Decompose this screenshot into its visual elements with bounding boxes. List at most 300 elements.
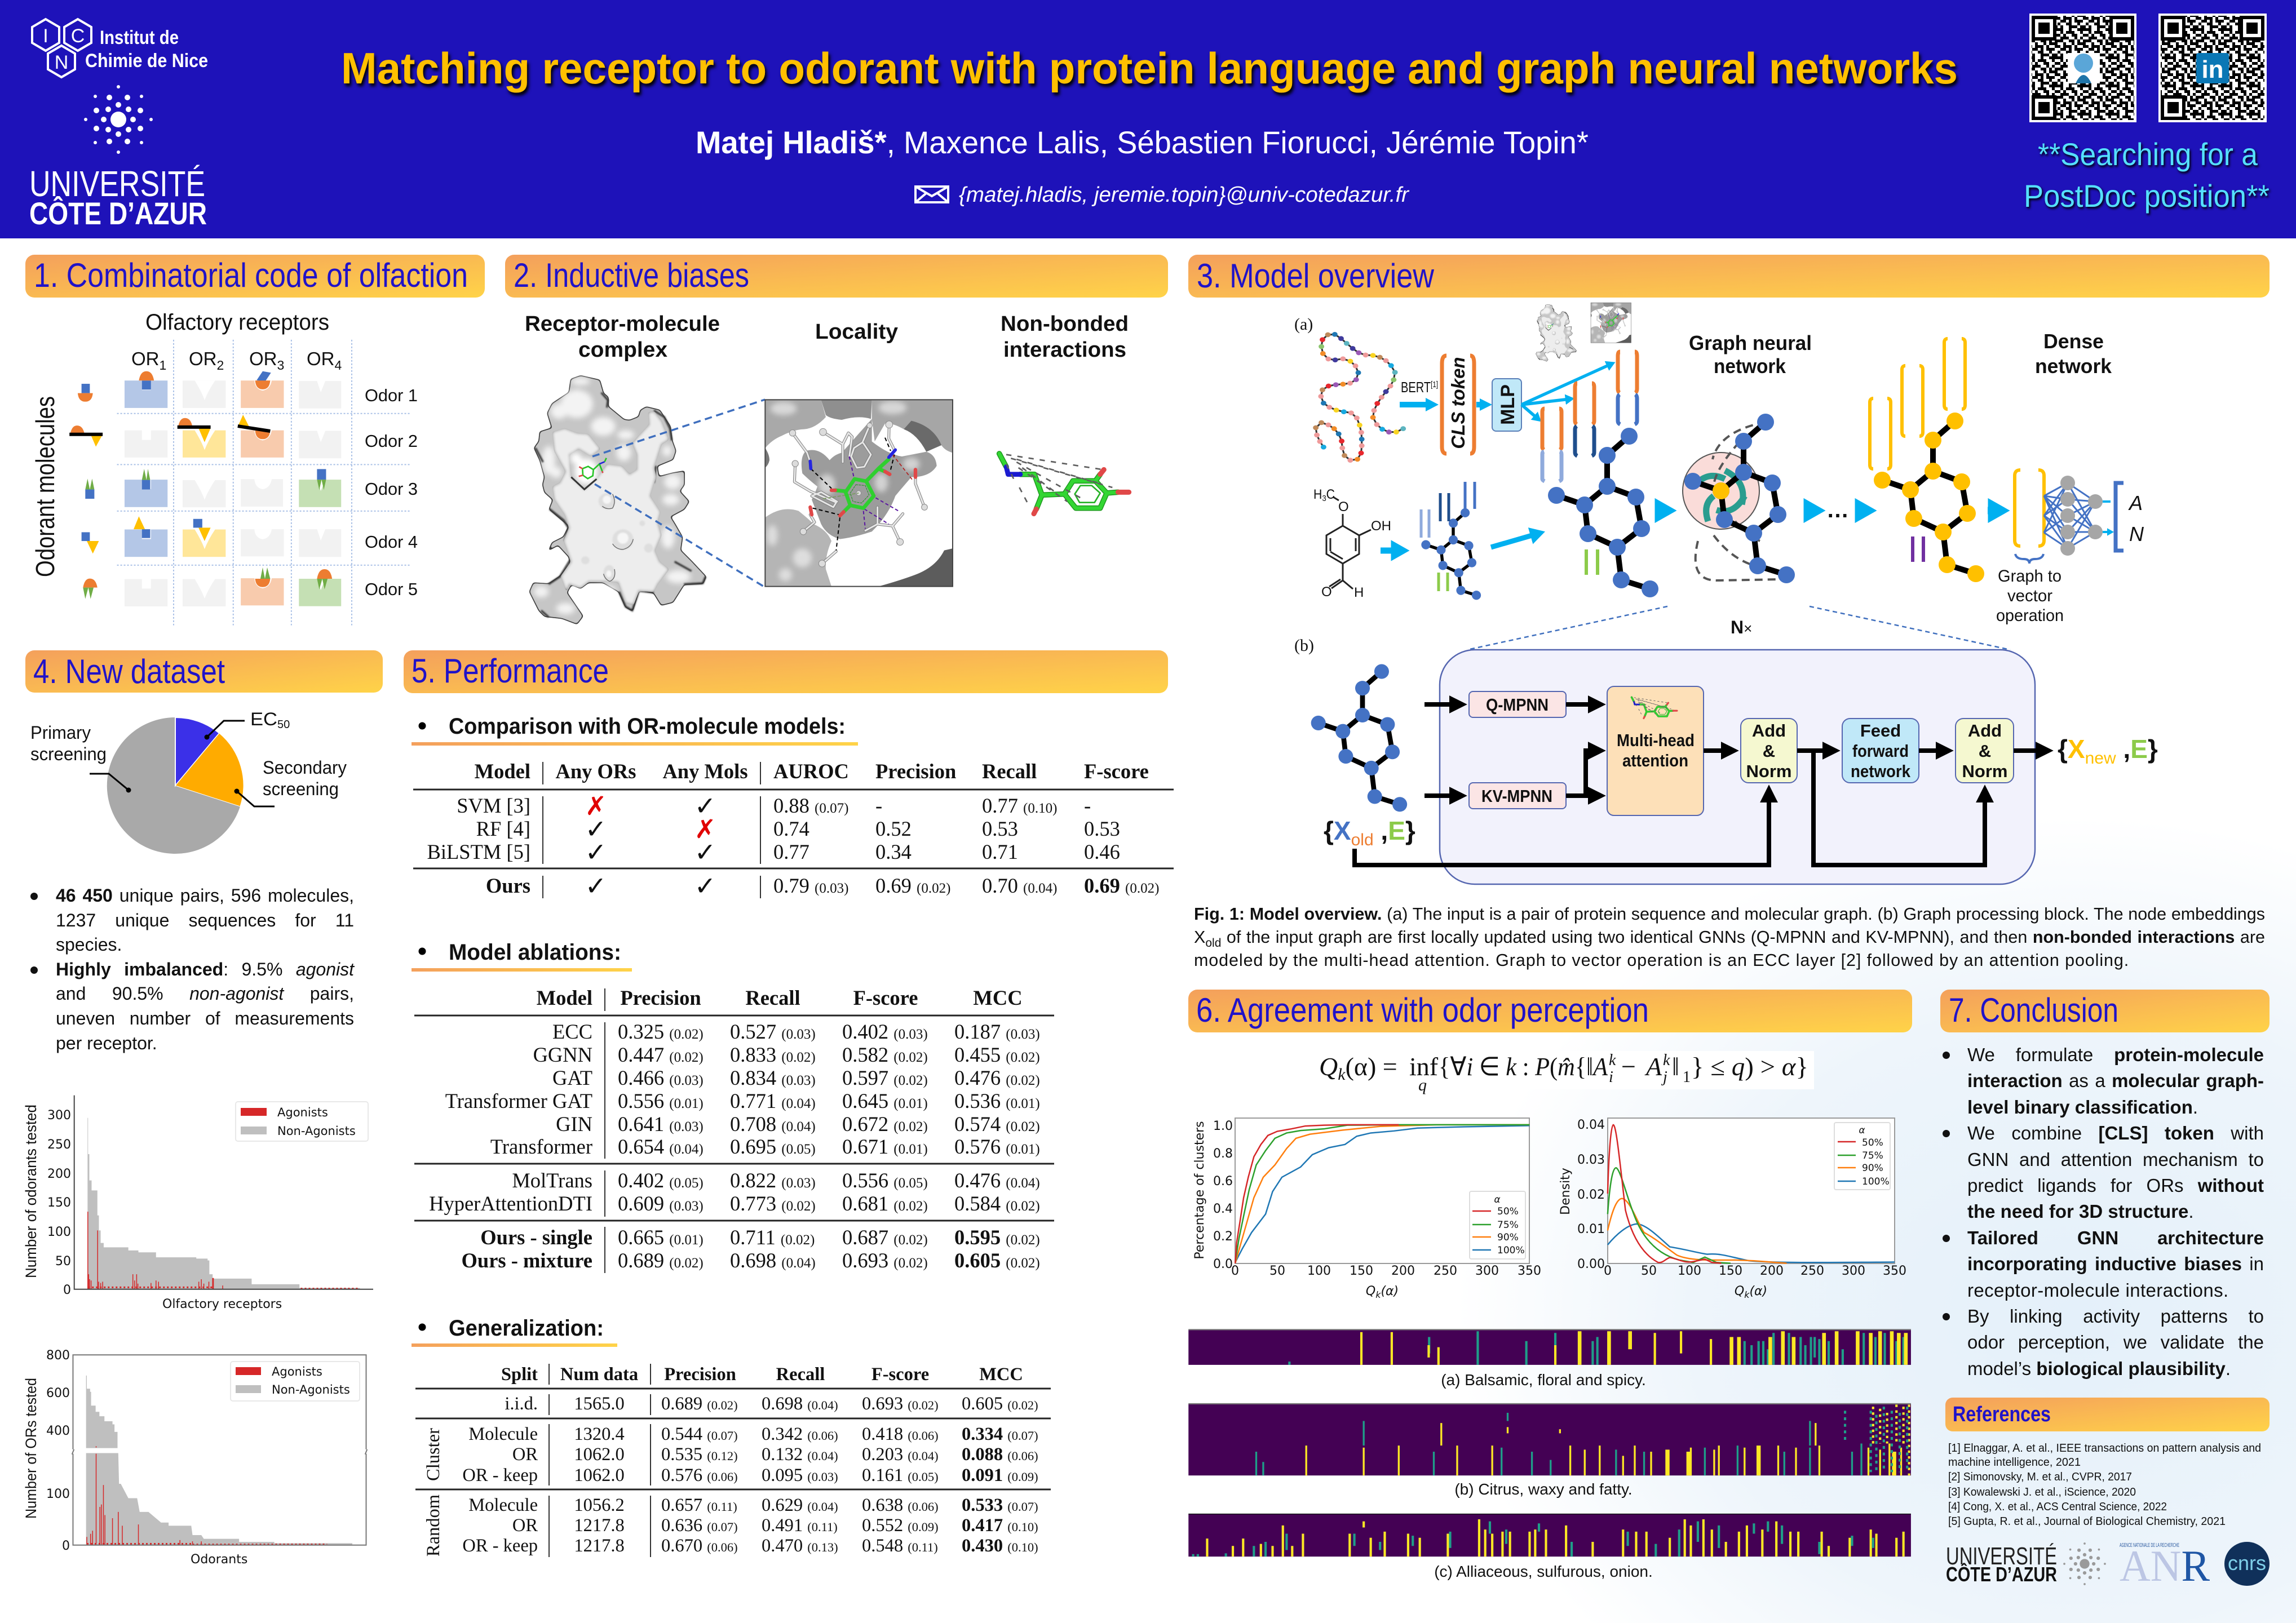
small molecular graph — [1421, 508, 1481, 600]
pie chart: screening types: 50 — [277, 719, 290, 731]
table: model ablations — [414, 986, 1054, 1273]
CLS token vector — [1442, 356, 1474, 454]
table: model ablations: 0.822 (0.03) — [730, 1169, 816, 1192]
table: comparison with OR-molecule models: 0.52 — [875, 817, 912, 840]
text block: conclusion bullets: receptor-molecule interactions. — [1967, 1280, 2229, 1301]
label: X new, E: new — [2085, 749, 2116, 768]
arrow: structure to small graph — [1381, 548, 1400, 553]
table: model ablations: MolTrans — [512, 1169, 592, 1192]
decorative background wash — [1297, 817, 2296, 1623]
block: KV-MPNN — [1469, 783, 1566, 809]
panel: 5. Performance — [404, 650, 1174, 1557]
chemical structure: vanillin — [1313, 487, 1391, 600]
formula: ‖ — [1672, 1052, 1679, 1081]
molecular graph: input — [1548, 428, 1658, 597]
table: comparison with OR-molecule models — [413, 760, 1174, 901]
bar chart: odorants tested per receptor: Number of odorants tested — [23, 1105, 39, 1278]
logo: Institut de Chimie de Nice: Institut de — [100, 27, 179, 48]
formula: 1 — [1683, 1068, 1691, 1086]
contact email: {matej.hladis, jeremie.topin}@univ-cotedazur.fr — [959, 183, 1409, 207]
table: generalization: 1565.0 — [574, 1394, 625, 1414]
authors: Matej Hladiš*, Maxence Lalis, Sébastien Fiorucci, Jérémie Topin* — [696, 125, 1589, 160]
heading: graph neural network — [1689, 331, 1812, 378]
figure caption: model overview: Xold of the input graph are first locally updated using two identical GNNs (Q-MPNN and KV-MPNN), and then non-bonded interactions are — [1194, 928, 2265, 950]
text block: conclusion bullets: the need for 3D structure. — [1967, 1201, 2194, 1222]
table: model ablations: Model — [537, 986, 592, 1009]
block: add and norm 2: & — [1979, 741, 1991, 761]
table: generalization: 0.693 (0.02) — [862, 1394, 939, 1414]
receptor column labels: 4 — [335, 358, 342, 373]
table: model ablations: 0.605 (0.02) — [954, 1249, 1040, 1272]
text block: dataset bullets: 1237 unique sequences for 11 — [56, 910, 354, 930]
text block: conclusion bullets: We formulate protein-molecule — [1967, 1044, 2264, 1065]
table: model ablations: 0.187 (0.03) — [954, 1020, 1040, 1043]
block: KV-MPNN: KV-MPNN — [1481, 786, 1552, 806]
line chart: cumulative Qk: 75% — [1497, 1220, 1519, 1231]
table: model ablations: 0.476 (0.02) — [954, 1066, 1040, 1089]
bullet marker — [30, 893, 38, 900]
figure caption: model overview — [1194, 904, 2265, 970]
line chart: density of Qk: 0 — [1604, 1264, 1612, 1278]
label: non-bonded interactions: Non-bonded — [1001, 312, 1129, 336]
table: model ablations: 0.556 (0.05) — [842, 1169, 928, 1192]
table: generalization: Cluster — [423, 1428, 444, 1481]
table: generalization: Recall — [776, 1364, 825, 1385]
table: comparison with OR-molecule models: Ours — [486, 874, 530, 897]
table: model ablations: 0.833 (0.02) — [730, 1043, 816, 1066]
caption (c): (c) Alliaceous, sulfurous, onion. — [1434, 1563, 1653, 1580]
bar chart: receptors tested per odorant: Non-Agonists — [272, 1383, 350, 1396]
table: comparison with OR-molecule models: ✓ — [585, 837, 607, 867]
arrows from MLP to node vectors — [1521, 364, 1611, 419]
text block: dataset bullets: and 90.5% non-agonist pairs, — [56, 983, 354, 1004]
table: comparison with OR-molecule models: AUROC — [773, 760, 849, 783]
table: model ablations: 0.584 (0.02) — [954, 1192, 1040, 1215]
line chart: density of Qk: 0.00 — [1577, 1257, 1605, 1271]
table: comparison with OR-molecule models: ✗ — [694, 814, 716, 844]
heading 2: 2. Inductive biases — [514, 256, 749, 294]
table: model ablations: ECC — [552, 1020, 592, 1043]
table: generalization: 0.698 (0.04) — [762, 1394, 838, 1414]
line chart: cumulative Qk: Percentage of clusters — [1193, 1121, 1207, 1260]
table: model ablations: 0.711 (0.02) — [730, 1226, 815, 1249]
block: add and norm 1: & — [1763, 741, 1775, 761]
bar chart: receptors tested per odorant: Agonists — [272, 1365, 322, 1378]
block: add and norm 1 — [1741, 719, 1797, 783]
formula: j — [1661, 1068, 1667, 1086]
table: comparison with OR-molecule models: RF [4] — [476, 817, 530, 840]
formula — [1313, 1051, 1814, 1094]
label: X old, E: , — [1374, 816, 1388, 845]
table: comparison with OR-molecule models: ✓ — [694, 837, 716, 867]
zoom guide lines between a and b — [1467, 606, 2010, 650]
table: model ablations: 0.447 (0.02) — [618, 1043, 704, 1066]
text block: conclusion bullets — [1967, 1044, 2264, 1379]
block: add and norm 1: Add — [1752, 721, 1786, 740]
table: generalization: OR - keep — [462, 1465, 538, 1485]
text block: conclusion bullets: By linking activity patterns to — [1967, 1306, 2264, 1327]
table: generalization: 0.088 (0.06) — [962, 1444, 1038, 1465]
heading 2 — [505, 255, 1168, 298]
heading: dense network — [2035, 330, 2112, 378]
table: model ablations: 0.609 (0.03) — [618, 1192, 704, 1215]
logo: Université Côte d'Azur footer: CÔTE D’AZUR — [1946, 1562, 2057, 1586]
formula: A — [1644, 1052, 1662, 1081]
table: generalization: OR — [512, 1515, 538, 1536]
table: model ablations: 0.665 (0.01) — [618, 1226, 704, 1249]
arrows between GNN stages — [1656, 507, 1999, 514]
logo: CNRS: cnrs — [2228, 1551, 2266, 1575]
table: model ablations: GGNN — [533, 1043, 592, 1066]
bar chart: odorants tested per receptor — [23, 1096, 373, 1311]
text block: dataset bullets: species. — [56, 934, 122, 955]
table: model ablations: 0.695 (0.05) — [730, 1135, 816, 1158]
table: generalization: 0.548 (0.11) — [862, 1536, 938, 1556]
label: graph to vector operation: vector — [2007, 587, 2052, 605]
table: comparison with OR-molecule models: 0.70 (0.04) — [982, 874, 1057, 897]
line chart: density of Qk: 0.01 — [1577, 1222, 1605, 1236]
heading 4 — [25, 650, 383, 693]
line chart: cumulative Qk: 250 — [1434, 1264, 1457, 1278]
table: model ablations: 0.834 (0.03) — [730, 1066, 816, 1089]
line chart: cumulative Qk: Q — [1366, 1284, 1375, 1298]
table: comparison with OR-molecule models: 0.53 — [1084, 817, 1120, 840]
table: comparison with OR-molecule models: 0.77 (0.10) — [982, 794, 1057, 817]
table: generalization: 0.533 (0.07) — [962, 1495, 1038, 1515]
molecular graph: output — [1874, 413, 1984, 582]
table: generalization: 0.552 (0.09) — [862, 1515, 939, 1536]
purple edge feature marks — [1913, 536, 1923, 562]
line chart: density of Qk: 0.02 — [1577, 1188, 1605, 1202]
line chart: cumulative Qk: k — [1375, 1289, 1381, 1300]
table: generalization: 1320.4 — [574, 1424, 625, 1444]
block: feed forward network: network — [1851, 761, 1911, 781]
receptor column labels: OR — [189, 348, 216, 369]
table: model ablations: 0.693 (0.02) — [842, 1249, 928, 1272]
bar chart: odorants tested per receptor: 0 — [63, 1283, 71, 1297]
call-out: searching for a postdoc — [2024, 136, 2270, 214]
logo: Université Côte d'Azur: CÔTE D’AZUR — [29, 196, 207, 231]
table: generalization: 0.605 (0.02) — [962, 1394, 1038, 1414]
logo: ANR: ANR — [2120, 1541, 2210, 1590]
table: comparison with OR-molecule models: 0.34 — [875, 840, 912, 863]
heatmap (b) — [1188, 1404, 1911, 1475]
table: generalization: 1056.2 — [574, 1495, 625, 1515]
line chart: cumulative Qk: 0.6 — [1213, 1174, 1233, 1189]
MLP block — [1492, 379, 1521, 431]
table: model ablations: Transformer — [490, 1135, 592, 1158]
line chart: density of Qk: 150 — [1719, 1264, 1742, 1278]
dense network diagram: N — [2129, 522, 2144, 546]
block: add and norm 2: Add — [1968, 721, 2002, 740]
table: model ablations: 0.687 (0.02) — [842, 1226, 928, 1249]
bar chart: receptors tested per odorant: 100 — [46, 1487, 70, 1501]
table: generalization: i.i.d. — [505, 1394, 538, 1414]
call-out: searching for a postdoc: PostDoc position** — [2024, 178, 2270, 214]
label: receptor-molecule complex — [525, 312, 720, 362]
bar chart: receptors tested per odorant: 0 — [62, 1539, 70, 1553]
line chart: cumulative Qk: 100 — [1307, 1264, 1331, 1278]
panel: 6. Agreement with odor perception — [1188, 990, 1912, 1580]
line chart: density of Qk: (α) — [1749, 1284, 1767, 1298]
label: X old, E: old — [1351, 831, 1374, 849]
table: generalization: 0.670 (0.06) — [661, 1536, 738, 1556]
call-out: searching for a postdoc: **Searching for a — [2038, 136, 2258, 172]
table: generalization: 0.629 (0.04) — [762, 1495, 838, 1515]
table: generalization: Random — [423, 1495, 444, 1557]
receptor column labels: 3 — [277, 358, 284, 373]
line chart: cumulative Qk: 100% — [1497, 1245, 1525, 1256]
reference list: [5] Gupta, R. et al., Journal of Biological Chemistry, 2021 — [1948, 1515, 2226, 1528]
table: model ablations: 0.708 (0.04) — [730, 1112, 816, 1136]
bullet marker — [1943, 1313, 1950, 1320]
table: model ablations: 0.325 (0.02) — [618, 1020, 704, 1043]
line chart: cumulative Qk: 300 — [1475, 1264, 1499, 1278]
formula: k — [1338, 1065, 1346, 1084]
odor row labels — [365, 385, 418, 599]
block: feed forward network — [1842, 719, 1919, 783]
panel: 7. Conclusion heading: 7. Conclusion — [1949, 991, 2118, 1029]
figure part label (b): (b) — [1294, 636, 1314, 655]
QR code: LinkedIn: in — [2201, 56, 2224, 83]
table: model ablations: 0.671 (0.01) — [842, 1135, 928, 1158]
text block: conclusion bullets: model’s biological plausibility. — [1967, 1358, 2231, 1379]
title: olfactory receptors: Olfactory receptors — [145, 310, 329, 335]
label: BERT: [1] — [1431, 380, 1438, 389]
table: generalization: 0.161 (0.05) — [862, 1465, 939, 1485]
table: model ablations: 0.672 (0.02) — [842, 1112, 928, 1136]
heatmap (a) — [1188, 1329, 1911, 1365]
table: model ablations: 0.536 (0.01) — [954, 1089, 1040, 1112]
axis label: odorant molecules: Odorant molecules — [30, 396, 60, 577]
table: generalization: Molecule — [468, 1495, 538, 1515]
table: comparison with OR-molecule models: F-score — [1084, 760, 1149, 783]
text block: conclusion bullets: We combine [CLS] token with — [1967, 1123, 2264, 1143]
heading: references — [1945, 1398, 2270, 1431]
chemical structure: vanillin: O — [1338, 499, 1349, 515]
chemical structure: vanillin: OH — [1371, 518, 1391, 534]
line chart: cumulative Qk: 1.0 — [1213, 1119, 1233, 1133]
heading 6 — [1188, 990, 1912, 1032]
line chart: cumulative Qk: 0.2 — [1213, 1230, 1233, 1244]
table: generalization: 0.576 (0.06) — [661, 1465, 738, 1485]
table: generalization: 0.417 (0.10) — [962, 1515, 1038, 1536]
odor row labels: Odor 2 — [365, 431, 418, 451]
logo: Institut de Chimie de Nice: C — [71, 25, 85, 47]
line chart: density of Qk: k — [1744, 1289, 1750, 1300]
pie chart: screening types: EC — [250, 709, 277, 729]
illustration: receptor surface cross-section — [530, 376, 706, 624]
block: add and norm 2 — [1956, 719, 2014, 783]
heading 5: 5. Performance — [412, 652, 609, 690]
bar chart: odorants tested per receptor: Non-Agonists — [277, 1124, 356, 1138]
text block: conclusion bullets: odor perception, we validate the — [1967, 1332, 2264, 1353]
pie chart: screening types: Secondary — [263, 757, 347, 778]
table: generalization: 1217.8 — [574, 1515, 625, 1536]
table: model ablations: 0.455 (0.02) — [954, 1043, 1040, 1066]
table: model ablations: 0.556 (0.01) — [618, 1089, 704, 1112]
table: model ablations: 0.641 (0.03) — [618, 1112, 704, 1136]
label: locality: Locality — [815, 320, 898, 344]
heatmap (c) — [1188, 1514, 1911, 1557]
text block: conclusion bullets: interaction as a molecular graph- — [1967, 1070, 2264, 1091]
table: model ablations: 0.595 (0.02) — [954, 1226, 1040, 1249]
panel: 4. New dataset — [23, 650, 383, 1567]
label: X old, E: E} — [1388, 816, 1415, 845]
icon: envelope — [915, 187, 948, 202]
table: comparison with OR-molecule models: 0.69 (0.02) — [875, 874, 950, 897]
line chart: cumulative Qk: 350 — [1518, 1264, 1541, 1278]
bar chart: receptors tested per odorant: 400 — [46, 1424, 70, 1438]
logo: Université Côte d'Azur footer — [1946, 1542, 2106, 1586]
reference list: [3] Kowalewski J. et al., iScience, 2020 — [1948, 1486, 2136, 1498]
table: model ablations: HyperAttentionDTI — [429, 1192, 592, 1215]
pie chart: screening types: screening — [263, 779, 339, 799]
bar chart: receptors tested per odorant: 600 — [46, 1386, 70, 1400]
table: model ablations: F-score — [853, 986, 918, 1009]
table: model ablations: 0.466 (0.03) — [618, 1066, 704, 1089]
line chart: density of Qk: 350 — [1883, 1264, 1906, 1278]
table: generalization: Molecule — [468, 1424, 538, 1444]
label: non-bonded interactions: interactions — [1003, 338, 1126, 362]
line chart: density of Qk: 90% — [1862, 1163, 1883, 1174]
heading: graph neural network: Graph neural — [1689, 331, 1812, 354]
formula: i — [1609, 1068, 1613, 1086]
table: model ablations: 0.476 (0.04) — [954, 1169, 1040, 1192]
table: comparison with OR-molecule models: Any ORs — [556, 760, 636, 783]
table: model ablations: 0.654 (0.04) — [618, 1135, 704, 1158]
line chart: density of Qk — [1559, 1118, 1906, 1300]
receptor column labels: OR — [307, 348, 335, 369]
subheading: comparison with OR-molecule models: Comparison with OR-molecule models: — [449, 714, 846, 739]
line chart: density of Qk: 50% — [1862, 1137, 1883, 1148]
table: generalization: Split — [501, 1364, 538, 1385]
reference list: [1] Elnaggar, A. et al., IEEE transactions on pattern analysis and — [1948, 1442, 2261, 1455]
table: generalization: 1217.8 — [574, 1536, 625, 1556]
title: Matching receptor to odorant with protein language and graph neural networks — [341, 43, 1958, 93]
bar chart: odorants tested per receptor: 300 — [47, 1108, 71, 1123]
table: generalization: 0.091 (0.09) — [962, 1465, 1038, 1485]
text block: conclusion bullets: GNN and attention mechanism to — [1967, 1149, 2264, 1170]
miniature receptor thumbnail — [1536, 304, 1576, 361]
table: generalization: 1062.0 — [574, 1465, 625, 1485]
bar chart: receptors tested per odorant: 800 — [46, 1349, 70, 1363]
receptor column labels: OR — [249, 348, 277, 369]
figure caption: model overview: modeled by the multi-head attention. Graph to vector operation is an ECC layer [2] followed by an attention pooling. — [1194, 951, 2129, 970]
reference list: [2] Simonovsky, M. et al., CVPR, 2017 — [1948, 1471, 2132, 1483]
bar chart: odorants tested per receptor: 100 — [47, 1225, 71, 1239]
line chart: density of Qk: α — [1859, 1125, 1865, 1136]
panel: 1. Combinatorial code of olfaction — [25, 255, 485, 626]
heading: dense network: network — [2035, 354, 2112, 378]
arrow: BERT to CLS token — [1400, 398, 1439, 411]
table: comparison with OR-molecule models: ✓ — [585, 871, 607, 901]
formula: Q — [1319, 1052, 1338, 1081]
table: generalization: 0.430 (0.10) — [962, 1536, 1038, 1556]
dense network diagram: A — [2128, 491, 2143, 515]
subheading: generalization — [412, 1316, 617, 1347]
chemical structure: vanillin: H — [1313, 487, 1323, 502]
bar chart: odorants tested per receptor: Olfactory receptors — [162, 1297, 282, 1311]
bullet marker — [1943, 1130, 1950, 1137]
table: comparison with OR-molecule models: 0.79 (0.03) — [773, 874, 848, 897]
table: generalization: Precision — [664, 1364, 736, 1385]
table: generalization: 0.203 (0.04) — [862, 1444, 939, 1465]
text block: dataset bullets: Highly imbalanced: 9.5% agonist — [56, 959, 354, 979]
bullet marker — [1943, 1235, 1950, 1242]
table: generalization: 1062.0 — [574, 1444, 625, 1465]
table: generalization: 0.491 (0.11) — [762, 1515, 838, 1536]
chemical structure: vanillin: H — [1354, 585, 1364, 600]
label: X new, E: , — [2116, 734, 2130, 764]
table: comparison with OR-molecule models: 0.69 (0.02) — [1084, 874, 1159, 897]
logo: Université Côte d'Azur footer: UNIVERSITÉ — [1946, 1542, 2057, 1570]
label: graph to vector operation — [1996, 567, 2064, 625]
table: model ablations: Ours - mixture — [461, 1249, 592, 1272]
table: comparison with OR-molecule models: 0.74 — [773, 817, 809, 840]
block: multi-head attention — [1607, 686, 1704, 815]
bar chart: odorants tested per receptor: 50 — [55, 1254, 71, 1269]
receptor column labels — [131, 348, 342, 373]
subheading: model ablations: Model ablations: — [449, 940, 621, 965]
receptor column labels: 1 — [159, 358, 166, 373]
QR code: personal page — [2029, 14, 2136, 122]
molecular graph: after attention — [1684, 414, 1795, 583]
table: model ablations: MCC — [973, 986, 1023, 1009]
line chart: cumulative Qk: α — [1494, 1194, 1501, 1205]
table: generalization: 0.418 (0.06) — [862, 1424, 939, 1444]
table: model ablations: 0.771 (0.04) — [730, 1089, 816, 1112]
odor row labels: Odor 4 — [365, 532, 418, 552]
caption (a): (a) Balsamic, floral and spicy. — [1441, 1371, 1646, 1389]
subheading: model ablations — [412, 940, 632, 972]
table: generalization: MCC — [979, 1364, 1023, 1385]
table: comparison with OR-molecule models: 0.71 — [982, 840, 1018, 863]
bar chart: odorants tested per receptor: Agonists — [277, 1106, 328, 1119]
table: generalization — [415, 1364, 1051, 1557]
reference list: [4] Cong, X. et al., ACS Central Science, 2022 — [1948, 1501, 2167, 1513]
label: graph to vector operation: operation — [1996, 606, 2064, 625]
output node vectors — [1870, 339, 2044, 546]
line chart: cumulative Qk: (α) — [1381, 1284, 1399, 1298]
table: comparison with OR-molecule models: Precision — [875, 760, 956, 783]
formula: inf — [1409, 1052, 1439, 1081]
label: receptor-molecule complex: complex — [578, 338, 667, 362]
table: model ablations: GIN — [556, 1112, 592, 1136]
line chart: cumulative Qk: 0.4 — [1213, 1202, 1233, 1216]
table: model ablations: GAT — [552, 1066, 592, 1089]
line chart: cumulative Qk: 200 — [1391, 1264, 1415, 1278]
table: model ablations: 0.681 (0.02) — [842, 1192, 928, 1215]
block: Q-MPNN — [1469, 691, 1566, 717]
illustration: non-bonded interactions molecule — [999, 454, 1129, 514]
text block: dataset bullets: 46 450 unique pairs, 596 molecules, — [56, 885, 354, 906]
arrow: small graph to featurized graph — [1491, 534, 1538, 547]
illustration: locality binding pocket — [765, 400, 953, 587]
text block: dataset bullets: uneven number of measurements — [56, 1008, 354, 1028]
formula: − — [1621, 1052, 1636, 1081]
table: comparison with OR-molecule models: ✓ — [585, 814, 607, 844]
text block: conclusion bullets: predict ligands for ORs without — [1967, 1175, 2264, 1196]
heading: dense network: Dense — [2043, 330, 2104, 353]
line chart: cumulative Qk: 50% — [1497, 1206, 1519, 1217]
table: model ablations: 0.402 (0.03) — [842, 1020, 928, 1043]
table: comparison with OR-molecule models: BiLSTM [5] — [427, 840, 530, 863]
line chart: density of Qk: 75% — [1862, 1150, 1883, 1161]
header banner — [0, 0, 2296, 238]
table: comparison with OR-molecule models: Any Mols — [662, 760, 748, 783]
table: generalization: 0.638 (0.06) — [862, 1495, 939, 1515]
